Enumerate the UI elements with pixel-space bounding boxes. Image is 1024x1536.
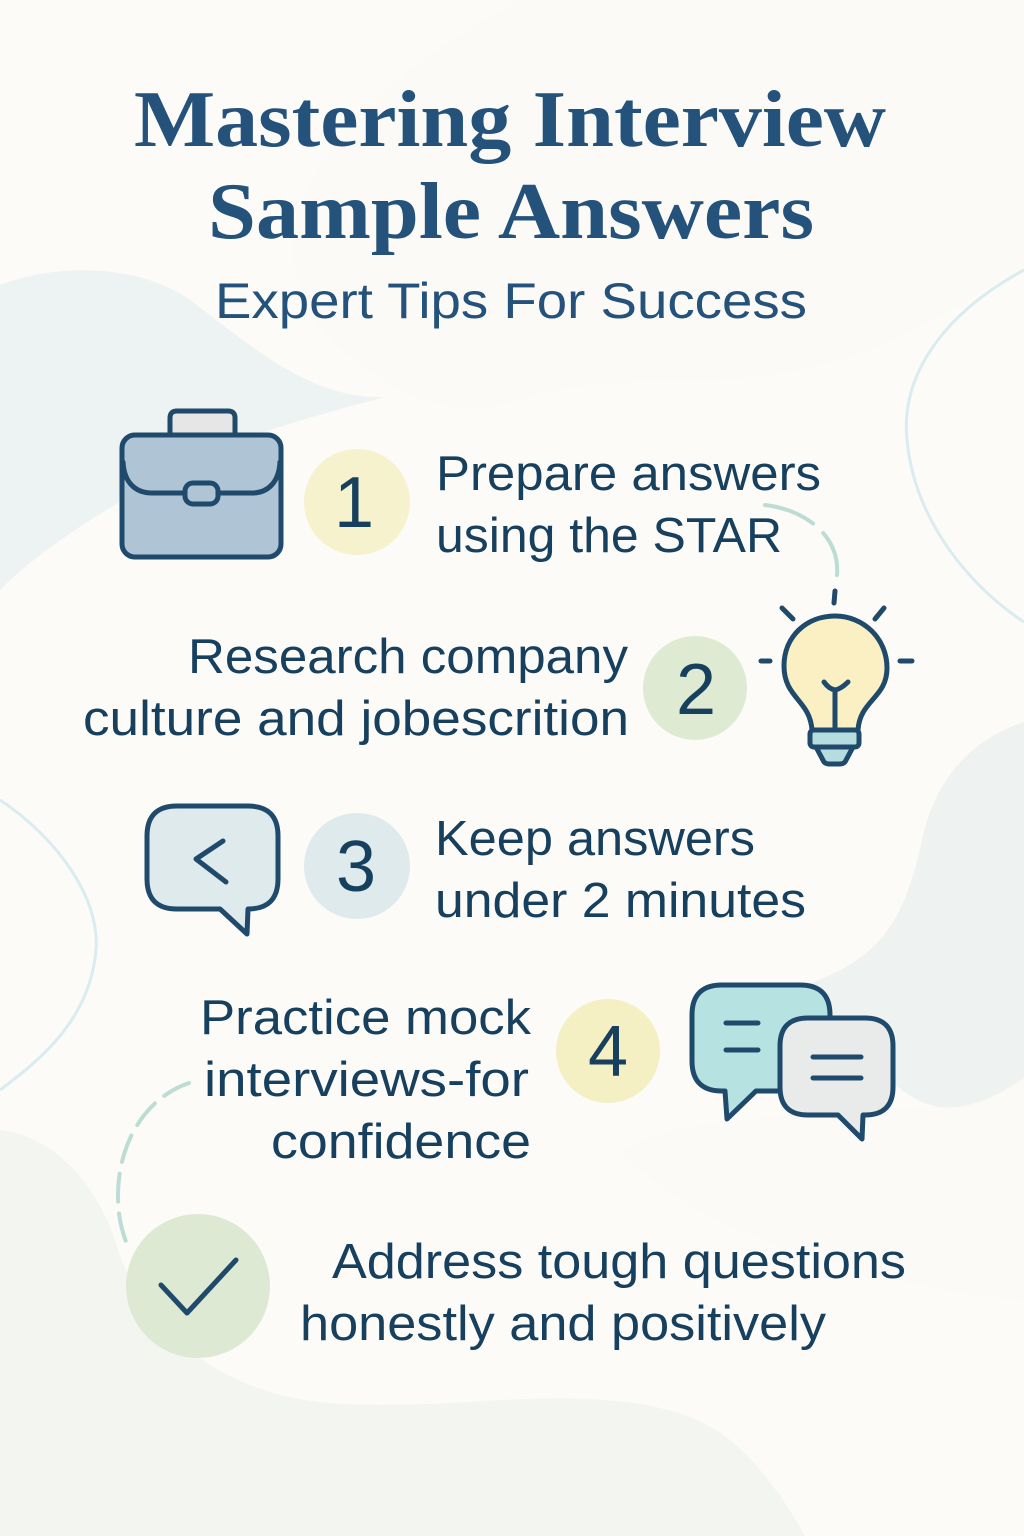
number badge 4 — [556, 999, 660, 1103]
tip 1: prepare answers — [122, 411, 821, 563]
number badge 2: 2 — [676, 650, 716, 730]
dashed connector to bulb — [765, 505, 837, 575]
tip 5: address tough questions — [126, 1214, 906, 1358]
number badge 2 — [643, 636, 747, 740]
tip text 3: under 2 minutes — [435, 874, 806, 928]
number badge 1: 1 — [334, 463, 374, 543]
icon: briefcase — [122, 411, 281, 557]
icon: light bulb — [761, 591, 912, 764]
tip text 1: Prepare answers — [436, 447, 821, 501]
tip text 2: Research company — [188, 630, 629, 684]
tip text 5: honestly and positively — [300, 1297, 827, 1351]
tip text 3 — [435, 812, 806, 928]
tip text 1: using the STAR — [436, 509, 782, 563]
dashed connector to check — [118, 1083, 189, 1249]
tip text 4: interviews-for — [204, 1053, 529, 1107]
number badge 1 — [304, 449, 410, 555]
subtitle: Expert Tips For Success — [215, 273, 807, 329]
number badge 4: 4 — [588, 1012, 628, 1092]
icon: speech bubble with chevron — [147, 806, 278, 934]
tip 4: practice mock interviews — [200, 985, 893, 1169]
number badge 3 — [304, 813, 410, 919]
tip text 5: Address tough questions — [332, 1235, 906, 1289]
tip text 4: Practice mock — [200, 991, 532, 1045]
tip 3: keep answers short — [147, 806, 806, 934]
tip text 2 — [83, 630, 629, 746]
tip text 4: confidence — [271, 1115, 531, 1169]
tip text 5 — [300, 1235, 906, 1351]
title: Sample Answers — [208, 168, 814, 256]
title: Mastering Interview — [134, 76, 886, 164]
icon: check badge — [126, 1214, 270, 1358]
tip text 4 — [200, 991, 532, 1169]
tip 2: research company — [83, 591, 912, 764]
icon: two chat bubbles — [692, 985, 893, 1139]
number badge 3: 3 — [336, 827, 376, 907]
tip text 2: culture and jobescrition — [83, 692, 629, 746]
tip text 1 — [436, 447, 821, 563]
tip text 3: Keep answers — [435, 812, 755, 866]
title — [134, 76, 886, 256]
